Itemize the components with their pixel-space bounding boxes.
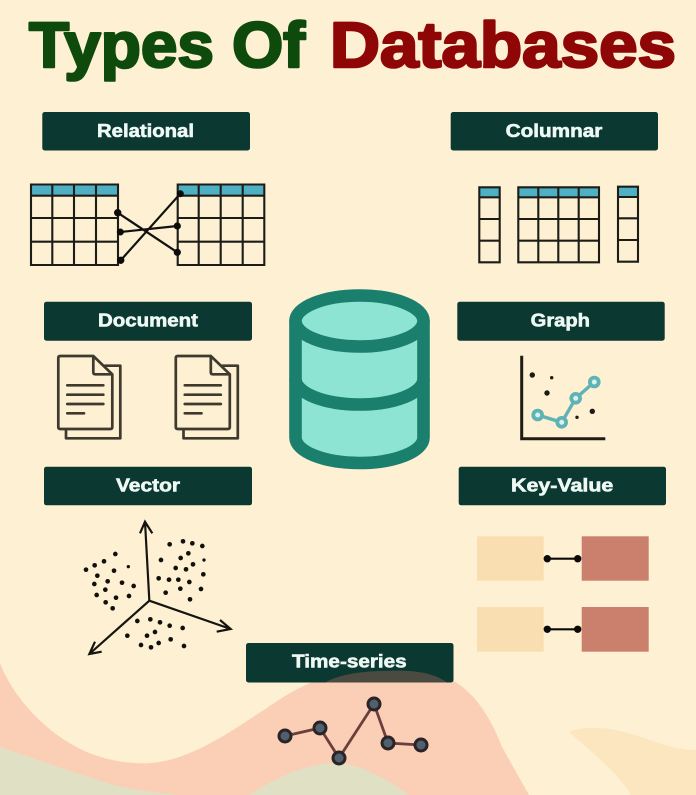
diagram: relational tables bbox=[31, 184, 264, 265]
label: Vector bbox=[44, 467, 252, 505]
label: Time-series: Time-series bbox=[292, 652, 407, 672]
icon: central database cylinder bbox=[296, 296, 424, 463]
label: Document: Document bbox=[98, 310, 198, 330]
label: Time-series bbox=[246, 643, 454, 682]
label: Relational: Relational bbox=[97, 121, 194, 141]
label: Vector: Vector bbox=[116, 476, 180, 496]
label: Columnar: Columnar bbox=[506, 121, 602, 141]
label: Graph: Graph bbox=[531, 310, 590, 330]
background wave: green bbox=[0, 747, 409, 795]
title: Databases bbox=[330, 9, 676, 81]
label: Graph bbox=[457, 302, 665, 341]
label: Columnar bbox=[451, 112, 658, 150]
label: Key-Value: Key-Value bbox=[511, 476, 613, 496]
chart: vector space axes and points bbox=[84, 522, 231, 654]
icon: documents left bbox=[58, 356, 120, 438]
background wave: orange bbox=[569, 728, 696, 795]
chart: graph scatter bbox=[522, 356, 605, 439]
background wave: peach bbox=[0, 663, 529, 795]
diagram: key-value pairs bbox=[477, 536, 649, 652]
label: Relational bbox=[42, 112, 250, 150]
icon: documents right bbox=[176, 356, 238, 438]
label: Key-Value bbox=[459, 467, 666, 505]
title: Types Of bbox=[29, 9, 306, 81]
chart: time series line bbox=[279, 698, 427, 764]
title bbox=[29, 9, 676, 81]
label: Document bbox=[44, 302, 252, 341]
diagram: columnar tables bbox=[479, 187, 638, 262]
